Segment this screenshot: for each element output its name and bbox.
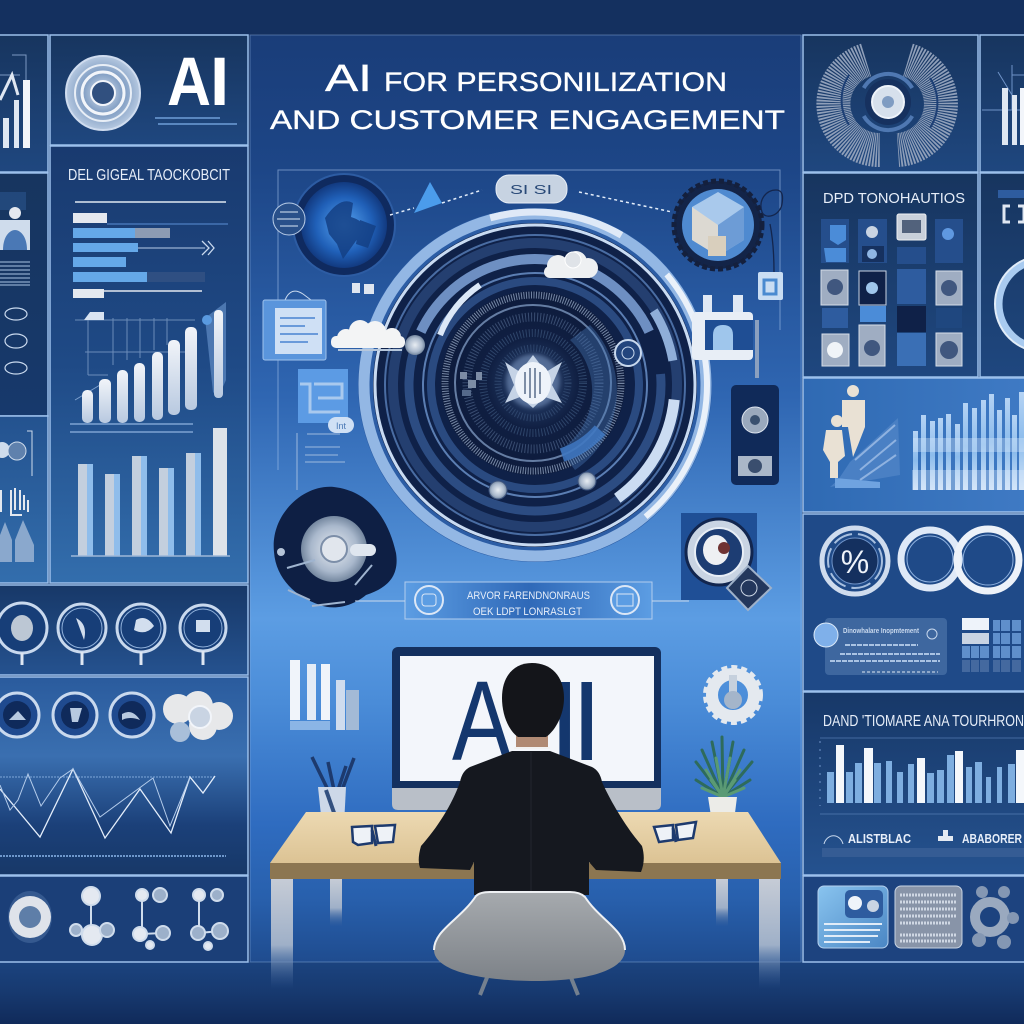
diagram frame <box>278 170 780 470</box>
heading: AI left <box>155 43 237 124</box>
caption box: OEK LDPT LONRASLGT <box>473 606 582 618</box>
center panel frame <box>250 35 801 962</box>
left panel backgrounds <box>0 35 248 962</box>
row: lens icons and cloud <box>0 691 233 742</box>
cloud top <box>544 251 598 278</box>
badge: top label <box>496 175 567 203</box>
bottom-right cards <box>818 886 1019 949</box>
mini table <box>962 618 1021 672</box>
dark blob robot icon <box>274 487 397 607</box>
column bar chart <box>71 428 230 556</box>
pen cup <box>312 757 354 825</box>
browser card <box>263 291 326 360</box>
small bars beside monitor <box>290 660 359 730</box>
small chart card <box>297 369 354 490</box>
percent and ring icons: % <box>841 544 869 580</box>
top-right edge chart <box>982 65 1024 145</box>
plant <box>696 737 752 829</box>
label strip <box>822 830 1024 857</box>
title: AND CUSTOMER ENGAGEMENT <box>270 105 785 135</box>
percent and ring icons <box>822 528 1019 594</box>
row: circular icons <box>0 603 226 665</box>
central ring graphic <box>293 143 777 627</box>
heading: AI left: A <box>167 43 211 120</box>
desk <box>270 812 781 989</box>
cloud left <box>331 320 405 350</box>
badge: top label: SI SI <box>510 182 552 197</box>
glasses <box>352 822 696 846</box>
horizontal bars <box>73 202 228 298</box>
title <box>270 58 785 135</box>
left edge icons <box>0 192 34 562</box>
small chart card: Int <box>336 421 346 431</box>
right edge ring <box>995 190 1024 352</box>
lens device <box>681 513 771 610</box>
line chart <box>0 769 226 856</box>
icon grid <box>821 214 963 366</box>
caption box <box>405 582 652 619</box>
title: FOR PERSONILIZATION <box>384 67 727 97</box>
text card: Dinowhalare Inopmtement <box>843 628 920 635</box>
heading: AI left: I <box>210 43 229 120</box>
heading: right panel: DPD TONOHAUTIOS <box>823 190 965 207</box>
rising bar chart <box>70 302 226 432</box>
right panel backgrounds <box>803 35 1024 962</box>
icon: hexagon gear <box>674 181 783 272</box>
right device and phone <box>692 272 783 485</box>
label strip: ALISTBLAC <box>848 831 912 846</box>
top-right radial graphic <box>833 60 941 150</box>
chair <box>434 892 625 995</box>
right bar chart <box>820 738 1024 814</box>
monitor: A <box>452 658 512 784</box>
icon: globe <box>273 174 395 276</box>
title: AI <box>325 58 372 100</box>
monitor <box>392 647 661 810</box>
monitor: II <box>549 658 602 784</box>
bottom-left network icons <box>8 887 228 950</box>
small connector device <box>352 283 374 294</box>
gear icon <box>705 667 761 723</box>
person <box>419 663 644 895</box>
dashed connector and triangle <box>390 182 672 215</box>
heading: left panel: DEL GIGEAL TAOCKOBCIT <box>68 167 230 184</box>
chart: top-left edge <box>0 55 30 148</box>
people and bars panel <box>823 385 1024 490</box>
icon: top-left disc <box>66 56 140 130</box>
caption box: ARVOR FARENDNONRAUS <box>467 590 590 602</box>
text card <box>814 618 947 675</box>
